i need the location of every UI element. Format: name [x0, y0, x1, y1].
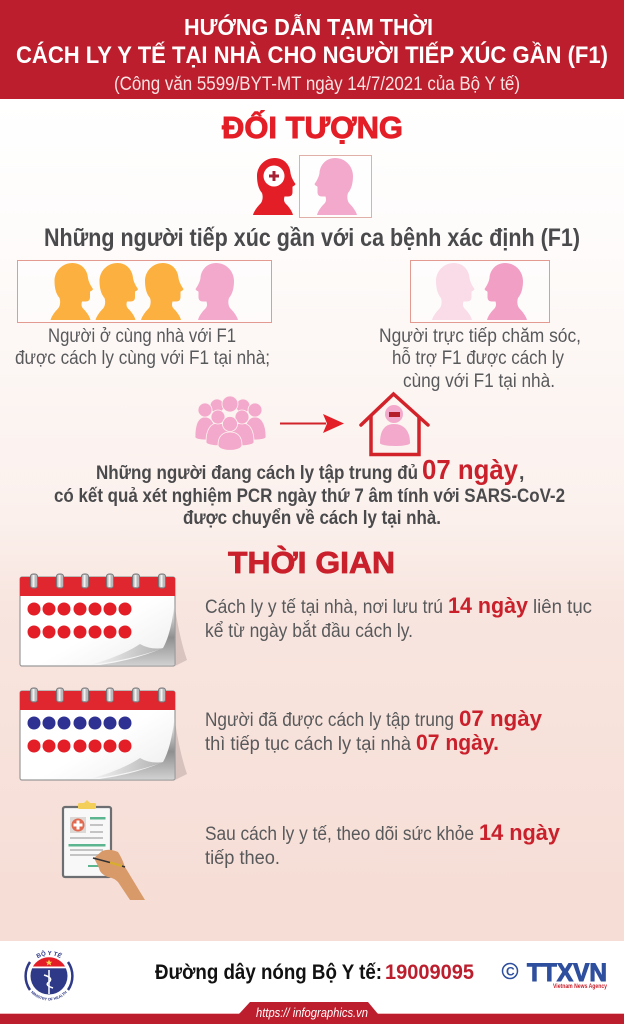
text: 14 days home quarantine: 14 ngày — [448, 593, 529, 618]
text: 7 days centralized then 7 days at home: 07 ngày — [459, 706, 543, 731]
logo: TTXVN: TTXVN — [527, 959, 607, 987]
text: 14 days home quarantine: Cách ly y tế tại nhà, nơi lưu trú — [205, 597, 443, 618]
text: household description: được cách ly cùng với F1 tại nhà; — [15, 348, 270, 369]
text: caregiver description: Người trực tiếp chăm sóc, — [379, 326, 581, 347]
text: centralized quarantine transfer: , — [519, 462, 524, 484]
text: centralized quarantine transfer: được chuyển về cách ly tại nhà. — [183, 507, 441, 529]
text: 7 days centralized then 7 days at home: thì tiếp tục cách ly tại nhà — [205, 734, 411, 755]
arrow — [280, 414, 344, 433]
header banner — [0, 0, 624, 99]
footer red bar — [0, 1002, 624, 1024]
text: 7 days centralized then 7 days at home: Người đã được cách ly tập trung — [205, 710, 454, 731]
icon: red head with medical cross — [253, 158, 296, 215]
logo: TTXVN — [502, 959, 608, 990]
icons: caregiver heads — [432, 263, 527, 320]
panel: caregivers — [379, 260, 581, 392]
hotline: 19009095 — [385, 961, 474, 984]
text: 14 days health monitoring: 14 ngày — [479, 820, 561, 845]
text: caregiver description — [379, 326, 581, 392]
icon: pink head in frame — [300, 156, 372, 218]
hotline: Đường dây nóng Bộ Y tế: — [155, 961, 382, 984]
panel: household contacts — [15, 260, 272, 369]
highlight: 07 days: 07 ngày — [422, 454, 518, 485]
text: household description — [15, 326, 270, 369]
icon: person isolating at home — [361, 394, 428, 454]
text: 14 days health monitoring: Sau cách ly y tế, theo dõi sức khỏe — [205, 824, 474, 845]
text: 14 days health monitoring — [205, 820, 561, 869]
text: 14 days home quarantine: liên tục — [533, 597, 592, 618]
icon: F1 and F0 heads — [253, 156, 372, 218]
text: 14 days health monitoring: tiếp theo. — [205, 848, 280, 869]
icon: clipboard with writing hand — [63, 800, 145, 900]
website url: https:// infographics.vn — [256, 1005, 368, 1020]
heading: thời gian: THỜI GIAN — [228, 544, 395, 580]
heading: đối tượng: ĐỐI TƯỢNG — [222, 109, 403, 145]
text: centralized quarantine transfer: Những người đang cách ly tập trung đủ — [96, 462, 418, 484]
logo: ministry of health: MINISTRY OF HEALTH — [31, 990, 67, 1000]
subtitle: (Công văn 5599/BYT-MT ngày 14/7/2021 của Bộ Y tế) — [114, 74, 520, 95]
text: 7 days centralized then 7 days at home: 07 ngày. — [416, 730, 499, 755]
logo: ministry of health — [24, 950, 74, 1000]
text: 14 days home quarantine: kể từ ngày bắt đầu cách ly. — [205, 620, 413, 642]
title line 1: HƯỚNG DẪN TẠM THỜI — [184, 12, 433, 40]
logo: ministry of health: BỘ Y TẾ — [36, 950, 62, 958]
text: caregiver description: cùng với F1 tại nhà. — [403, 371, 555, 392]
text: centralized quarantine transfer — [54, 454, 565, 529]
icon: calendar 14 days — [20, 574, 187, 666]
icons: household heads — [50, 263, 238, 320]
text: caregiver description: hỗ trợ F1 được cách ly — [392, 347, 564, 369]
text: 14 days home quarantine — [205, 593, 592, 642]
footer — [0, 950, 624, 1024]
text: household description: Người ở cùng nhà với F1 — [48, 326, 236, 347]
text: 7 days centralized then 7 days at home — [205, 706, 543, 755]
logo: TTXVN: Vietnam News Agency — [553, 984, 608, 990]
logo: TTXVN: C — [506, 964, 515, 978]
icon: crowd of people — [195, 396, 266, 450]
icon: calendar 7 plus 7 days — [20, 688, 187, 780]
